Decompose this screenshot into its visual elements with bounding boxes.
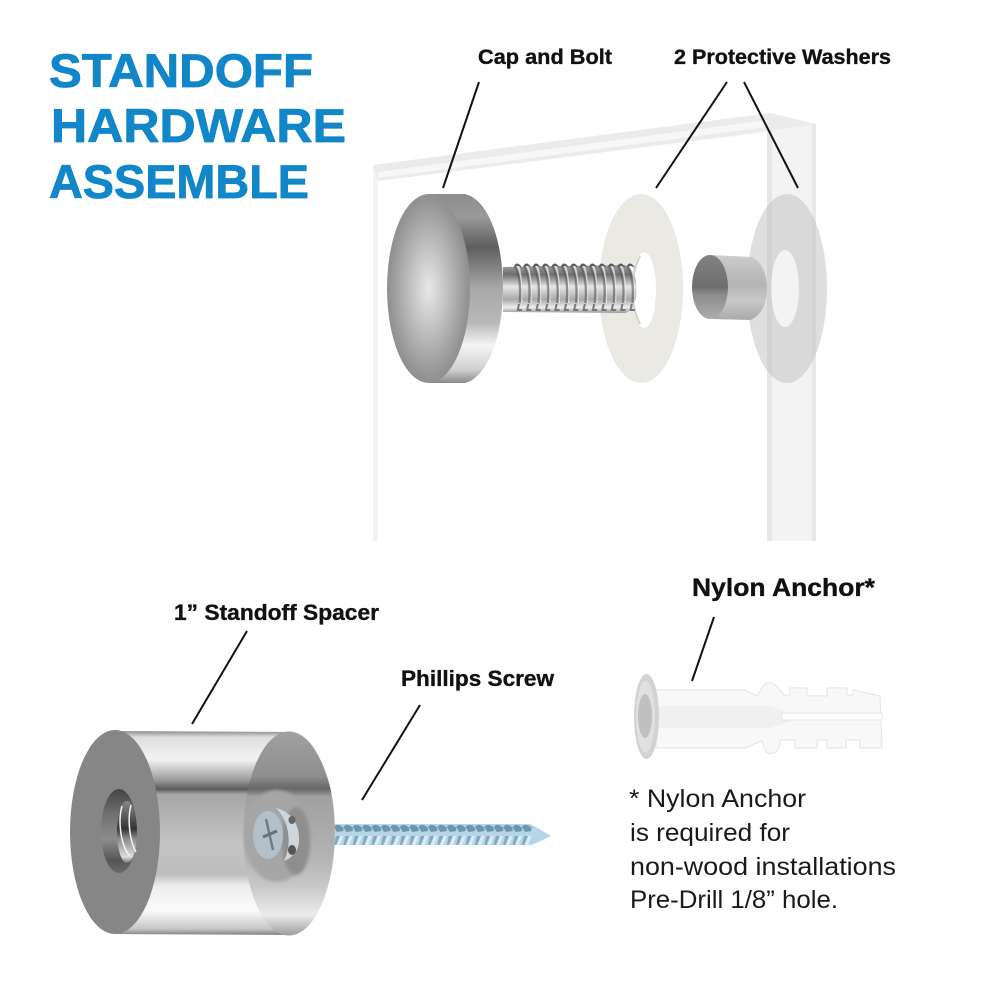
title: HARDWARE (51, 99, 346, 152)
label: cap and bolt: Cap and Bolt (478, 46, 612, 69)
label: nylon anchor: Nylon Anchor* (692, 574, 875, 602)
nylon anchor (634, 674, 882, 759)
label: phillips screw: Phillips Screw (401, 666, 555, 691)
anchor note (629, 785, 896, 914)
screw shaft (333, 824, 551, 845)
anchor note: is required for (630, 819, 790, 847)
screw tip (532, 825, 551, 845)
title: STANDOFF (49, 44, 313, 97)
leader lines (192, 82, 798, 800)
anchor flange (634, 674, 659, 759)
title (49, 44, 346, 208)
label: protective washers: 2 Protective Washers (674, 46, 891, 69)
sleeve (692, 255, 767, 320)
inner recess (244, 790, 310, 882)
cap face (387, 194, 470, 383)
bolt thread (513, 262, 635, 314)
cap and bolt (387, 194, 637, 383)
acrylic panel (373, 113, 816, 541)
back washer (747, 194, 827, 383)
far end (244, 732, 334, 936)
front face (70, 730, 160, 934)
label: standoff spacer: 1” Standoff Spacer (174, 600, 379, 625)
title: ASSEMBLE (49, 155, 309, 208)
anchor centre band (659, 706, 790, 728)
anchor note: Pre-Drill 1/8” hole. (630, 886, 838, 914)
screw head (253, 807, 310, 875)
anchor slit (782, 713, 882, 720)
anchor opening (638, 694, 652, 738)
anchor note: non-wood installations (630, 853, 896, 881)
standoff spacer (70, 730, 551, 936)
anchor note: * Nylon Anchor (629, 785, 806, 813)
bolt shank (503, 265, 637, 313)
anchor body (656, 683, 882, 754)
threaded hole (101, 789, 137, 873)
spacer body (115, 731, 335, 935)
front washer (599, 194, 683, 383)
cap side (428, 194, 503, 383)
